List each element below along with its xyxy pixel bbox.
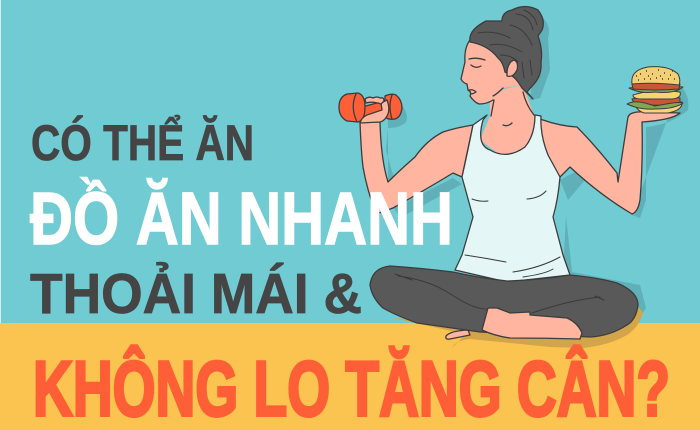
left hand bbox=[360, 100, 389, 123]
face profile bbox=[461, 40, 493, 104]
lower patty bbox=[632, 96, 680, 105]
title line 3: THOẢI MÁI & bbox=[30, 261, 362, 326]
floor shadow bbox=[393, 300, 643, 348]
bottom bun bbox=[635, 102, 682, 113]
hair strands bbox=[478, 10, 537, 78]
tank top bbox=[455, 115, 570, 282]
upper patty bbox=[632, 82, 680, 90]
left arm holding dumbbell bbox=[360, 122, 473, 214]
middle bun bbox=[633, 91, 680, 99]
eye and brow bbox=[469, 58, 485, 94]
tank folds bbox=[465, 191, 560, 277]
left hand fingers bbox=[365, 97, 384, 104]
neck lines bbox=[491, 88, 534, 126]
background: teal wall bbox=[0, 0, 700, 324]
neck and chest bbox=[480, 85, 540, 160]
lower lettuce bbox=[627, 102, 683, 109]
woman figure bbox=[339, 6, 680, 339]
title line 2: ĐỒ ĂN NHANH bbox=[30, 177, 453, 260]
woman shadow bbox=[386, 15, 688, 330]
right arm holding burger bbox=[535, 112, 680, 214]
leg creases bbox=[395, 274, 604, 313]
dumbbell bbox=[339, 93, 402, 122]
top bun bbox=[632, 67, 680, 85]
background: yellow floor bbox=[0, 323, 700, 430]
ear bbox=[507, 60, 518, 76]
burger bbox=[627, 67, 683, 113]
upper lettuce bbox=[629, 86, 683, 92]
face bbox=[461, 35, 522, 104]
feet bbox=[482, 308, 582, 339]
hair bbox=[470, 6, 543, 99]
crossed legs bbox=[370, 266, 638, 337]
left toes bbox=[446, 330, 470, 339]
sesame seeds bbox=[636, 70, 675, 80]
title line 1: CÓ THỂ ĂN bbox=[31, 115, 254, 171]
